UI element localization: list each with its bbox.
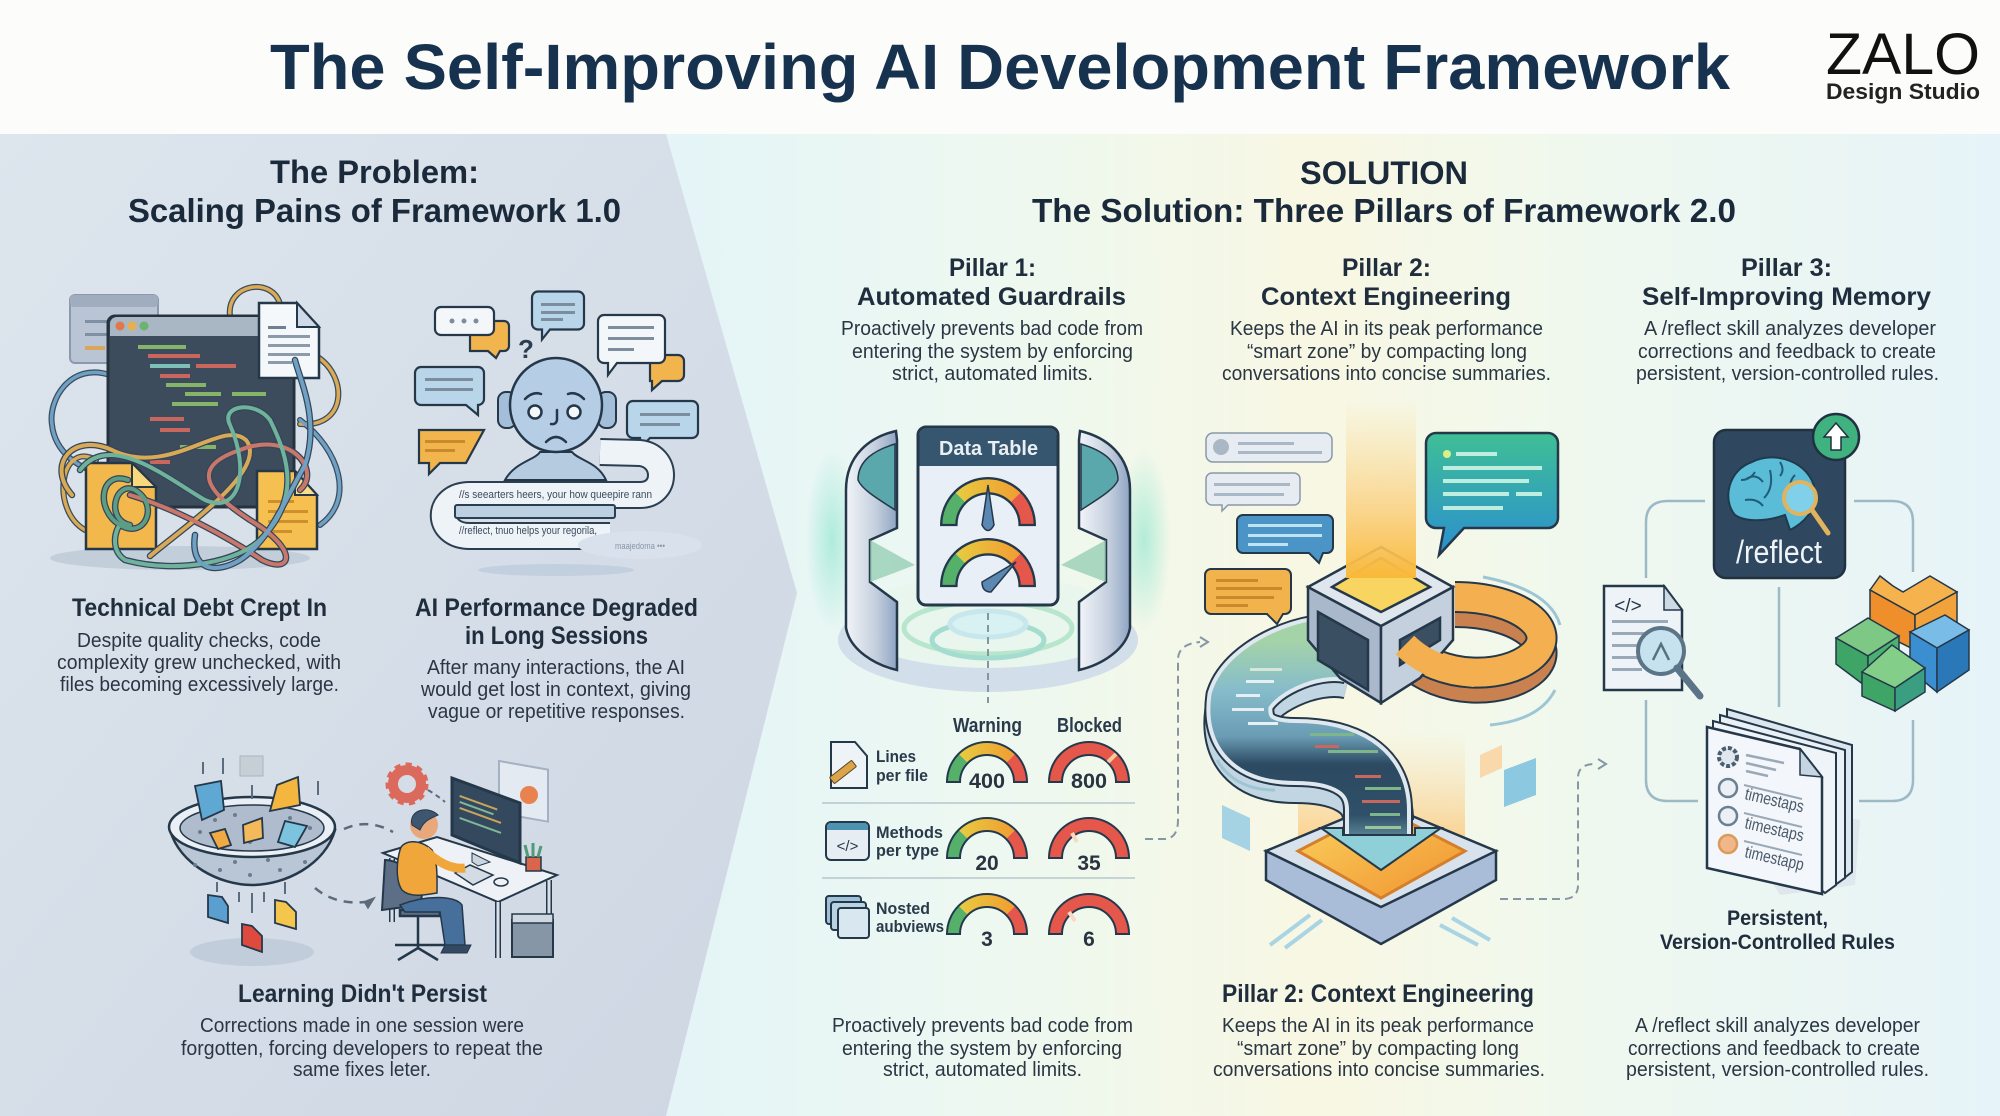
row: nested subviews: 3 bbox=[981, 928, 993, 951]
gauge: bottom needle right bbox=[941, 539, 1035, 592]
badge: up arrow bbox=[1813, 414, 1859, 460]
lower light beam bbox=[1298, 733, 1465, 851]
heading: the problem: Scaling Pains of Framework 1.0 bbox=[128, 192, 621, 229]
versioned rules stack bbox=[1707, 709, 1860, 895]
question mark: ? bbox=[518, 334, 534, 364]
row: nested subviews: 6 bbox=[1083, 928, 1095, 951]
arrow: dashed platform to memory bbox=[1500, 759, 1606, 899]
logo: ZALO Design Studio: Design Studio bbox=[1826, 79, 1980, 104]
illustration: confused AI robot bbox=[415, 292, 702, 576]
gear bbox=[388, 765, 426, 803]
pillar 1 header: Pillar 1: bbox=[949, 254, 1036, 282]
row: nested subviews: aubviews bbox=[876, 917, 944, 936]
text: technical debt crept in: files becoming excessively large. bbox=[60, 674, 339, 696]
chat bubbles bbox=[415, 292, 698, 474]
heading: the problem bbox=[128, 154, 621, 229]
pillar 2 header: Keeps the AI in its peak performance bbox=[1230, 318, 1543, 340]
illustration: leaky colander bbox=[169, 756, 335, 966]
pillar 2 header bbox=[1222, 254, 1551, 385]
heading: the solution bbox=[1032, 155, 1736, 229]
code ribbon bbox=[1239, 648, 1378, 835]
row: lines per file: 400 bbox=[969, 770, 1005, 793]
arrow: dashed table to context engine bbox=[1145, 637, 1208, 839]
text: bottom pillar 1 summary: entering the system by enforcing bbox=[842, 1038, 1122, 1060]
row: methods per type: 20 bbox=[975, 852, 999, 875]
pillar 1 header: Automated Guardrails bbox=[857, 283, 1126, 311]
pillar 2 header: Context Engineering bbox=[1261, 283, 1511, 311]
row: methods per type: per type bbox=[876, 841, 939, 860]
illustration: developer at desk bbox=[382, 761, 557, 960]
white document bbox=[259, 303, 319, 378]
text: AI performance degraded: would get lost in context, giving bbox=[420, 679, 691, 701]
chat bubbles entering bbox=[1205, 433, 1558, 624]
row: lines per file: per file bbox=[876, 766, 928, 785]
text: learning didn't persist: same fixes leter. bbox=[293, 1059, 431, 1081]
illustration: context engineering bbox=[1205, 400, 1560, 948]
text: bottom pillar 1 summary: strict, automated limits. bbox=[883, 1059, 1082, 1081]
column headers: Warning bbox=[953, 715, 1022, 737]
logo: ZALO Design Studio: ZALO bbox=[1826, 22, 1980, 87]
row: methods per type: Methods bbox=[876, 823, 943, 842]
text: persistent rules label bbox=[1660, 907, 1895, 954]
pillar 2 header: Pillar 2: bbox=[1342, 254, 1431, 282]
header band bbox=[0, 0, 2000, 134]
text: bottom pillar 3 summary: corrections and feedback to create bbox=[1628, 1038, 1920, 1060]
text: learning didn't persist: Corrections made in one session were bbox=[200, 1015, 524, 1037]
illustration: self-improving memory loop bbox=[1604, 414, 1969, 895]
versioned rules stack: timestapp bbox=[1743, 842, 1806, 874]
text: bottom pillar 3 summary: A /reflect skill analyzes developer bbox=[1635, 1015, 1920, 1037]
pillar 1 header: entering the system by enforcing bbox=[852, 341, 1133, 363]
data table card bbox=[918, 427, 1058, 605]
row: methods per type: 35 bbox=[1077, 852, 1101, 875]
text: bottom pillar 2 summary: conversations into concise summaries. bbox=[1213, 1059, 1545, 1081]
versioned rules stack: timestaps bbox=[1743, 813, 1806, 845]
pillar 1 header bbox=[841, 254, 1143, 385]
text: AI performance degraded: AI Performance Degraded bbox=[415, 594, 698, 622]
pillar 3 header: Pillar 3: bbox=[1741, 254, 1832, 282]
row: lines per file bbox=[830, 742, 1129, 793]
illustration: tangled technical debt bbox=[50, 287, 340, 570]
heading: the solution: The Solution: Three Pillars of Framework 2.0 bbox=[1032, 192, 1736, 229]
left guard pillar bbox=[846, 431, 915, 670]
pillar 3 header: Self-Improving Memory bbox=[1642, 283, 1931, 311]
base platform bbox=[1266, 803, 1496, 948]
right guard pillar bbox=[1061, 431, 1130, 670]
pillar 1 header: Proactively prevents bad code from bbox=[841, 318, 1143, 340]
column headers: Blocked bbox=[1057, 715, 1122, 737]
pillar 3 header: A /reflect skill analyzes developer bbox=[1644, 318, 1936, 340]
text: bottom pillar 1 summary: Proactively prevents bad code from bbox=[832, 1015, 1133, 1037]
text: technical debt crept in bbox=[57, 594, 341, 696]
row: nested subviews bbox=[826, 894, 1129, 951]
code document with lens bbox=[1604, 586, 1700, 696]
heading: the problem: The Problem: bbox=[270, 154, 479, 190]
versioned rules stack: timestaps bbox=[1743, 784, 1806, 816]
text: technical debt crept in: complexity grew unchecked, with bbox=[57, 652, 341, 674]
yellow documents bbox=[86, 463, 317, 549]
upper light beam bbox=[1346, 400, 1416, 578]
main code window bbox=[108, 316, 294, 507]
illustration: guardrails bbox=[806, 431, 1170, 703]
text: AI performance degraded bbox=[415, 594, 698, 723]
pillar 3 header: corrections and feedback to create bbox=[1638, 341, 1936, 363]
row: methods per type: </> bbox=[837, 838, 859, 855]
code document with lens: </> bbox=[1614, 596, 1642, 617]
text: technical debt crept in: Despite quality checks, code bbox=[77, 630, 321, 652]
text: learning didn't persist: forgotten, forcing developers to repeat the bbox=[181, 1038, 543, 1060]
column headers bbox=[953, 715, 1122, 737]
flow swooshes bbox=[1217, 577, 1560, 790]
text: persistent rules label: Persistent, bbox=[1727, 907, 1828, 930]
text: persistent rules label: Version-Controlled Rules bbox=[1660, 931, 1895, 954]
text: learning didn't persist bbox=[181, 980, 543, 1081]
row: lines per file: Lines bbox=[876, 747, 916, 766]
text: AI performance degraded: vague or repetitive responses. bbox=[428, 701, 685, 723]
text: technical debt crept in: Technical Debt Crept In bbox=[72, 594, 327, 622]
heading: the solution: SOLUTION bbox=[1300, 155, 1468, 191]
orange loop ribbon bbox=[1405, 597, 1542, 688]
pillar 2 header: conversations into concise summaries. bbox=[1222, 363, 1551, 385]
puzzle blocks bbox=[1836, 576, 1969, 711]
row: lines per file: 800 bbox=[1071, 770, 1107, 793]
arrows: colander to developer bbox=[315, 824, 393, 907]
S-shaped conversation pipe: //reflect, tnuo helps your regorila, bbox=[459, 525, 597, 537]
robot head bbox=[498, 358, 616, 480]
pillar 3 header: persistent, version-controlled rules. bbox=[1636, 363, 1939, 385]
table: limits bbox=[822, 715, 1135, 951]
title: The Self-Improving AI Development Framework bbox=[270, 31, 1730, 103]
gauge: top needle up bbox=[941, 478, 1035, 530]
floating tiles bbox=[1222, 745, 1536, 851]
pillar 3 header bbox=[1636, 254, 1939, 385]
row: methods per type bbox=[826, 818, 1129, 875]
row: nested subviews: Nosted bbox=[876, 899, 930, 918]
text: AI performance degraded: After many interactions, the AI bbox=[427, 657, 685, 679]
tangled cables bbox=[62, 360, 310, 568]
text: AI performance degraded: in Long Sessions bbox=[465, 622, 648, 650]
/reflect card bbox=[1714, 430, 1845, 578]
data table card: Data Table bbox=[939, 438, 1038, 460]
text: bottom pillar 2 summary: “smart zone” by compacting long bbox=[1237, 1038, 1519, 1060]
pillar 1 header: strict, automated limits. bbox=[892, 363, 1093, 385]
pillar 2 header: “smart zone” by compacting long bbox=[1247, 341, 1527, 363]
text: bottom pillar 3 summary bbox=[1626, 1015, 1929, 1081]
text: bottom pillar 1 summary bbox=[832, 1015, 1133, 1081]
ribbon shadow layers bbox=[1239, 662, 1378, 820]
panel: problem background bbox=[0, 134, 797, 1116]
S-shaped conversation pipe: //s seearters heers, your how queepire rann bbox=[459, 489, 652, 501]
text: bottom pillar 3 summary: persistent, version-controlled rules. bbox=[1626, 1059, 1929, 1081]
text: bottom pillar 2 summary: Pillar 2: Context Engineering bbox=[1222, 980, 1534, 1008]
compactor cube bbox=[1308, 547, 1453, 703]
/reflect card: /reflect bbox=[1736, 534, 1822, 570]
text: learning didn't persist: Learning Didn't Persist bbox=[238, 980, 488, 1008]
S-shaped conversation pipe bbox=[444, 452, 702, 559]
text: bottom pillar 2 summary bbox=[1213, 980, 1545, 1081]
S-shaped conversation pipe: maajedoma ••• bbox=[615, 541, 665, 551]
text: bottom pillar 2 summary: Keeps the AI in its peak performance bbox=[1222, 1015, 1534, 1037]
